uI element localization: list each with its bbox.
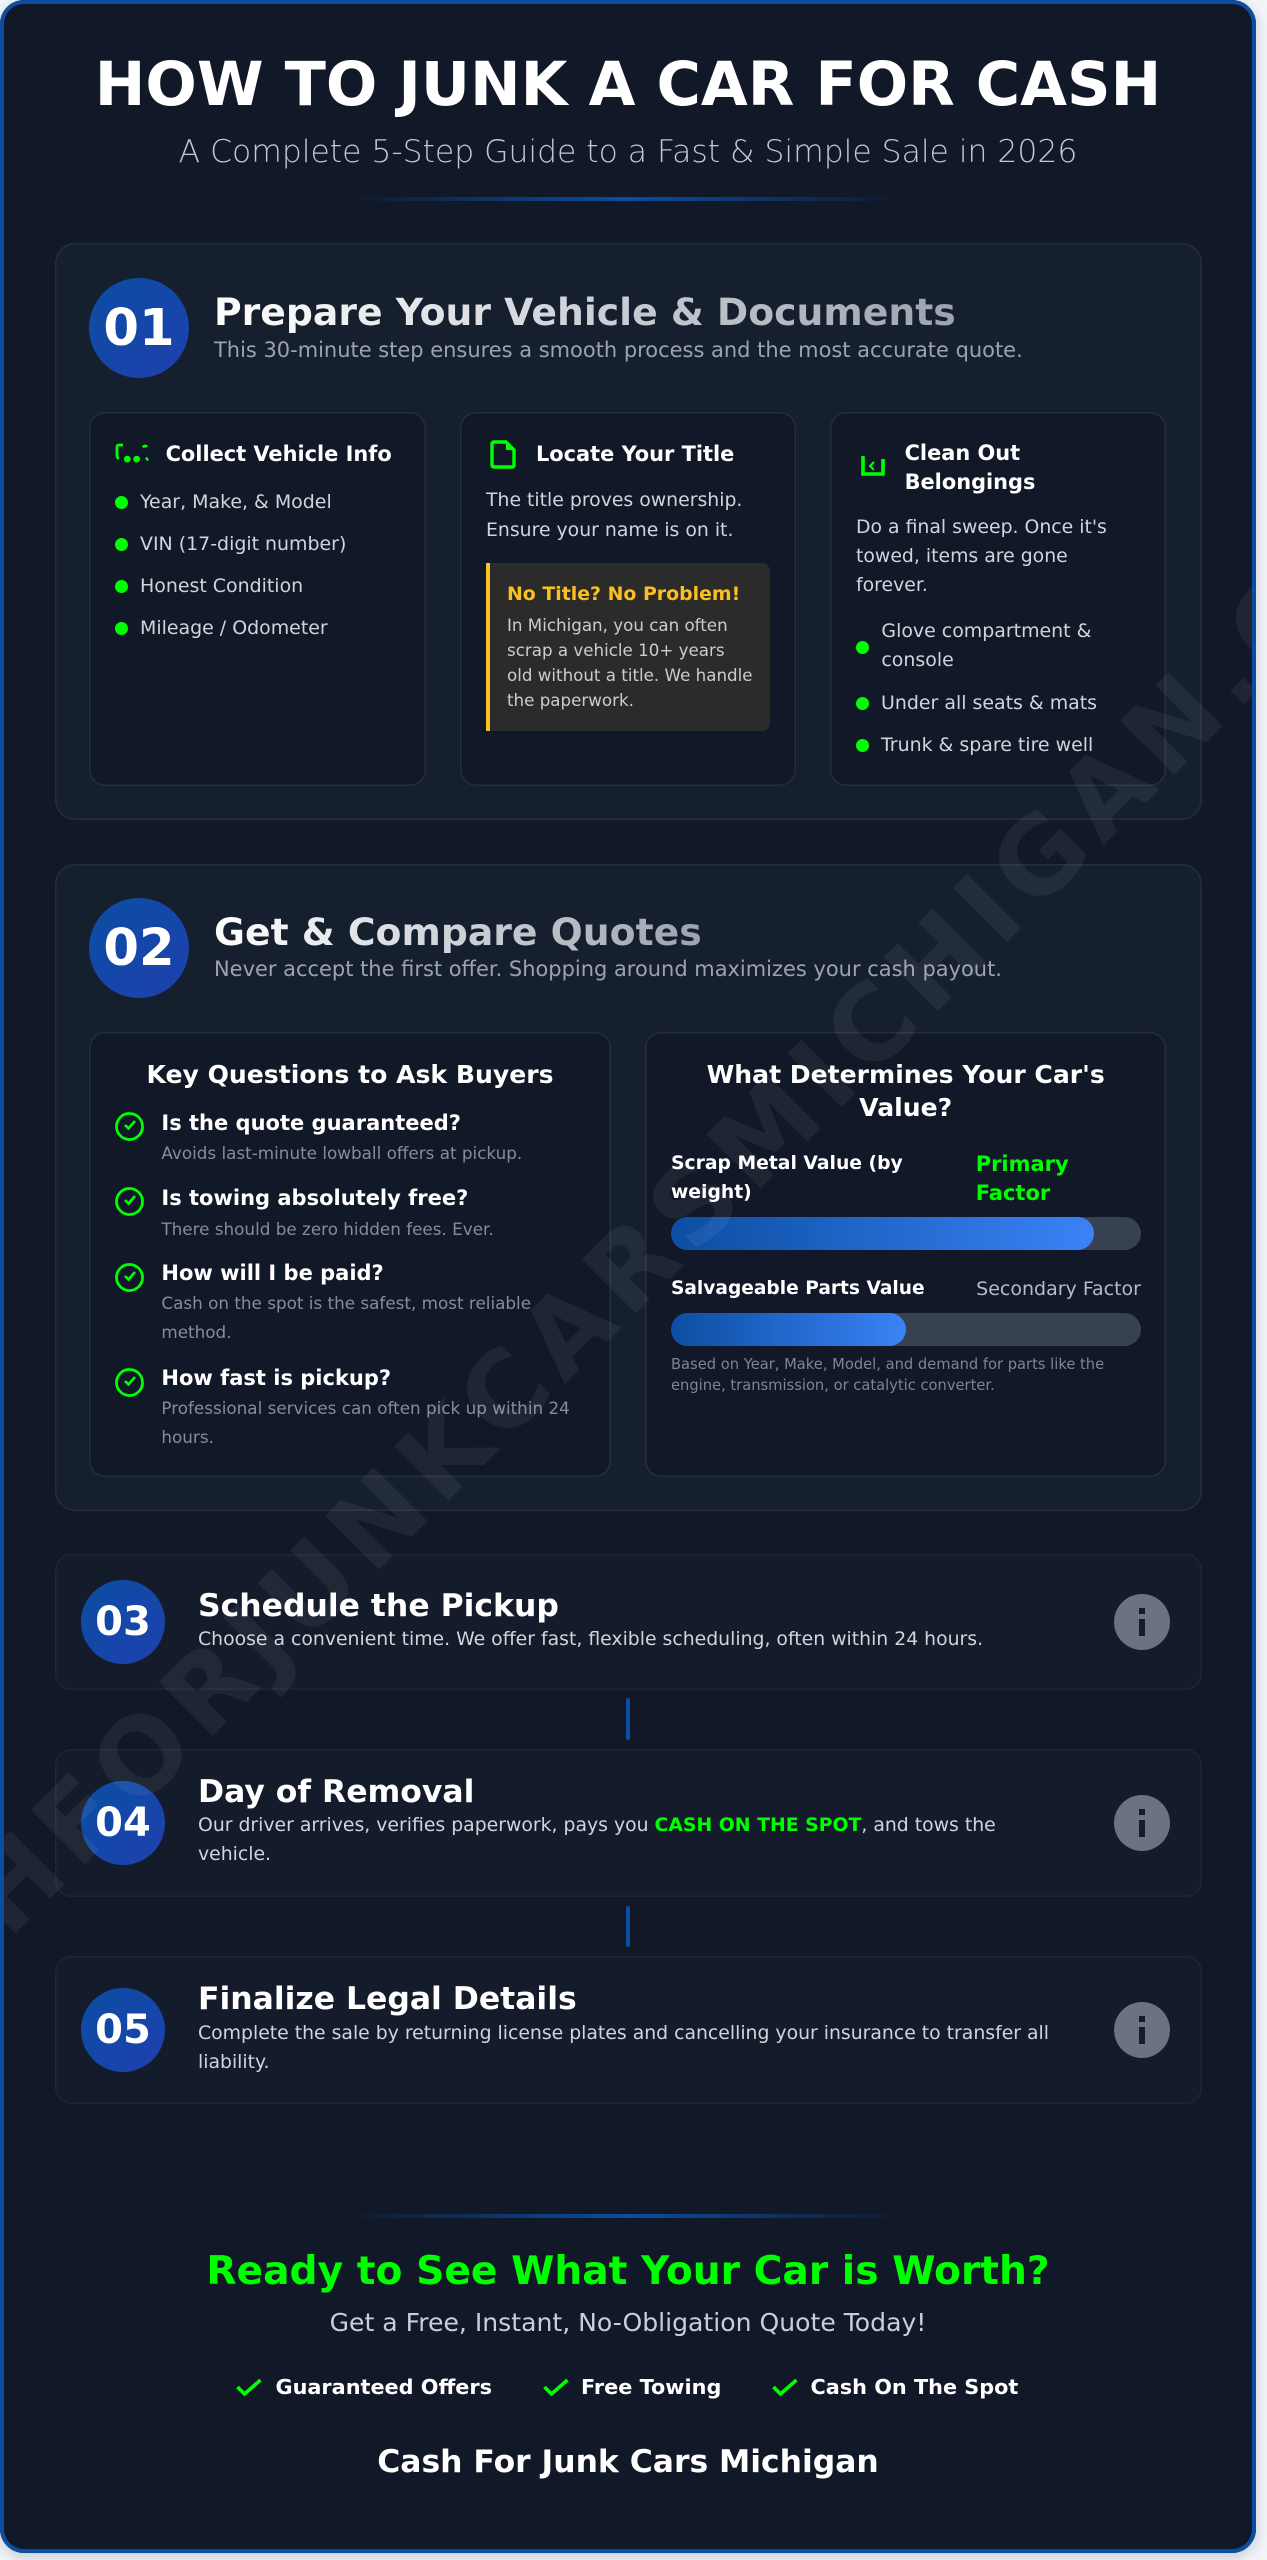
checklist: belongings: Glove compartment &: [881, 620, 1091, 642]
icon: car: [116, 444, 149, 462]
step 05 text: Complete the sale by returning license plates and cancelling your insurance to transfer all: [198, 2023, 1049, 2044]
callout text: scrap a vehicle 10+ years: [507, 640, 725, 660]
panel: step 04 day of removal: [55, 1749, 1202, 1897]
chart note: [671, 1356, 1104, 1394]
connector arrow 04 to 05: [626, 1906, 630, 1947]
step number 03: 03: [95, 1599, 151, 1645]
icon: check circle: [115, 1112, 144, 1141]
icon: info: [1114, 1594, 1170, 1650]
chart note: engine, transmission, or catalytic converter.: [671, 1377, 995, 1394]
footer subheading: Get a Free, Instant, No-Obligation Quote Today!: [330, 2308, 926, 2337]
checklist: vehicle info: [115, 491, 346, 639]
bar chart: parts 50%: [671, 1313, 1141, 1346]
footer call to action heading: Ready to See What Your Car is Worth?: [206, 2248, 1050, 2294]
step 05 heading: Finalize Legal Details: [198, 1981, 577, 2017]
card heading: Value?: [859, 1092, 952, 1122]
question 2: There should be zero hidden fees. Ever.: [161, 1218, 494, 1238]
callout text: old without a title. We handle: [507, 665, 753, 685]
question 3: Cash on the spot is the safest, most reliable: [161, 1293, 531, 1313]
card heading: Locate Your Title: [536, 442, 734, 466]
checklist: vehicle info: Honest Condition: [140, 575, 303, 597]
icon: check: [236, 2378, 262, 2396]
step 05 text: [198, 2023, 1049, 2073]
callout: no title: [486, 563, 770, 731]
icon: check: [772, 2378, 798, 2396]
question 2: Is towing absolutely free?: [161, 1186, 468, 1210]
step number 01: [89, 278, 189, 378]
question 3: How will I be paid?: [161, 1261, 384, 1285]
callout text: [507, 615, 753, 710]
label: secondary factor: Secondary Factor: [976, 1278, 1141, 1300]
checklist: vehicle info: Mileage / Odometer: [140, 617, 328, 639]
icon: info: [1114, 2002, 1170, 2058]
step number 04: 04: [95, 1800, 151, 1846]
card heading: [707, 1060, 1105, 1122]
card text: Do a final sweep. Once it's: [856, 517, 1107, 538]
checklist: belongings: Trunk & spare tire well: [881, 734, 1093, 756]
card heading: Collect Vehicle Info: [166, 442, 392, 466]
step 05 text: liability.: [198, 2052, 269, 2073]
question 1: [115, 1111, 522, 1163]
question 4: hours.: [161, 1427, 214, 1447]
label: primary factor: Factor: [976, 1181, 1050, 1205]
question 3: [115, 1261, 531, 1342]
step 02 heading: Get & Compare Quotes: [214, 910, 702, 954]
panel: step 02 get and compare quotes: [55, 864, 1202, 1511]
step number 03: [81, 1580, 165, 1664]
title: HOW TO JUNK A CAR FOR CASH: [95, 50, 1161, 120]
card text: [856, 517, 1107, 596]
card text: [486, 490, 742, 541]
step number 02: [89, 898, 189, 998]
card heading: Belongings: [905, 470, 1035, 494]
card heading: Key Questions to Ask Buyers: [146, 1060, 554, 1088]
panel: step 01 prepare vehicle and documents: [55, 243, 1202, 820]
step 04 text: Our driver arrives, verifies paperwork, pays you CASH ON THE SPOT, and tows the: [198, 1815, 996, 1836]
benefit: cash on the spot: Cash On The Spot: [810, 2375, 1018, 2399]
label: primary factor: [976, 1152, 1069, 1205]
footer divider: [345, 2214, 907, 2218]
step 04 text: [198, 1815, 996, 1865]
card text: Ensure your name is on it.: [486, 520, 733, 541]
step 01 description: This 30-minute step ensures a smooth process and the most accurate quote.: [214, 338, 1023, 362]
chart note: Based on Year, Make, Model, and demand for parts like the: [671, 1356, 1104, 1372]
card text: forever.: [856, 575, 928, 596]
card text: towed, items are gone: [856, 546, 1068, 567]
label: salvageable parts: Salvageable Parts Value: [671, 1278, 925, 1299]
step 01 heading: Prepare Your Vehicle & Documents: [214, 290, 956, 334]
label: scrap metal: [671, 1153, 903, 1203]
card: collect vehicle info: [89, 412, 426, 786]
step 02 description: Never accept the first offer. Shopping around maximizes your cash payout.: [214, 957, 1002, 981]
step number 05: [81, 1988, 165, 2072]
benefit: guaranteed offers: Guaranteed Offers: [276, 2375, 492, 2399]
icon: info: [1114, 1795, 1170, 1851]
question 1: Avoids last-minute lowball offers at pickup.: [161, 1143, 522, 1163]
icon: check circle: [115, 1263, 144, 1292]
question 4: How fast is pickup?: [161, 1366, 391, 1390]
checklist: belongings: Under all seats & mats: [881, 692, 1097, 714]
connector arrow 03 to 04: [626, 1698, 630, 1740]
step 04 heading: Day of Removal: [198, 1774, 474, 1810]
checklist: vehicle info: VIN (17-digit number): [140, 533, 346, 555]
callout heading: No Title? No Problem!: [507, 583, 740, 605]
card heading: Clean Out: [905, 441, 1020, 465]
question 3: method.: [161, 1322, 232, 1342]
icon: check circle: [115, 1187, 144, 1216]
benefit: free towing: Free Towing: [581, 2375, 721, 2399]
checklist: belongings: [856, 620, 1097, 756]
icon: document: [490, 440, 516, 469]
checklist: belongings: console: [881, 649, 954, 671]
icon: box: [861, 456, 885, 476]
step number 05: 05: [95, 2007, 151, 2053]
callout text: In Michigan, you can often: [507, 615, 728, 635]
question 2: [115, 1186, 494, 1238]
card heading: What Determines Your Car's: [707, 1060, 1105, 1088]
step 04 text: vehicle.: [198, 1844, 271, 1865]
card: key questions: [89, 1032, 611, 1477]
question 4: [115, 1366, 570, 1447]
label: primary factor: Primary: [976, 1152, 1069, 1176]
checklist: vehicle info: Year, Make, & Model: [140, 491, 332, 513]
question 4: Professional services can often pick up within 24: [161, 1398, 570, 1418]
step number 02: 02: [103, 918, 175, 978]
subtitle: A Complete 5-Step Guide to a Fast & Simple Sale in 2026: [179, 134, 1077, 170]
panel: step 05 finalize legal details: [55, 1956, 1202, 2104]
card text: The title proves ownership.: [486, 490, 742, 511]
icon: check circle: [115, 1368, 144, 1397]
footer brand name: Cash For Junk Cars Michigan: [377, 2444, 879, 2480]
step number 04: [81, 1781, 165, 1865]
step number 01: 01: [103, 298, 175, 358]
card: what determines value: [645, 1032, 1166, 1477]
bar chart: scrap metal 90%: [671, 1217, 1141, 1250]
label: scrap metal: Scrap Metal Value (by: [671, 1153, 903, 1174]
question 1: Is the quote guaranteed?: [161, 1111, 461, 1135]
icon: check: [543, 2378, 569, 2396]
label: scrap metal: weight): [671, 1182, 752, 1203]
card heading: [905, 441, 1035, 494]
step 03 text: Choose a convenient time. We offer fast, flexible scheduling, often within 24 hours.: [198, 1629, 983, 1650]
card: clean out belongings: [830, 412, 1166, 786]
footer benefits row: [236, 2375, 1018, 2399]
header divider: [345, 197, 907, 201]
card: locate your title: [460, 412, 796, 786]
panel: step 03 schedule pickup: [55, 1554, 1202, 1690]
step 03 heading: Schedule the Pickup: [198, 1588, 559, 1624]
callout text: the paperwork.: [507, 690, 634, 710]
